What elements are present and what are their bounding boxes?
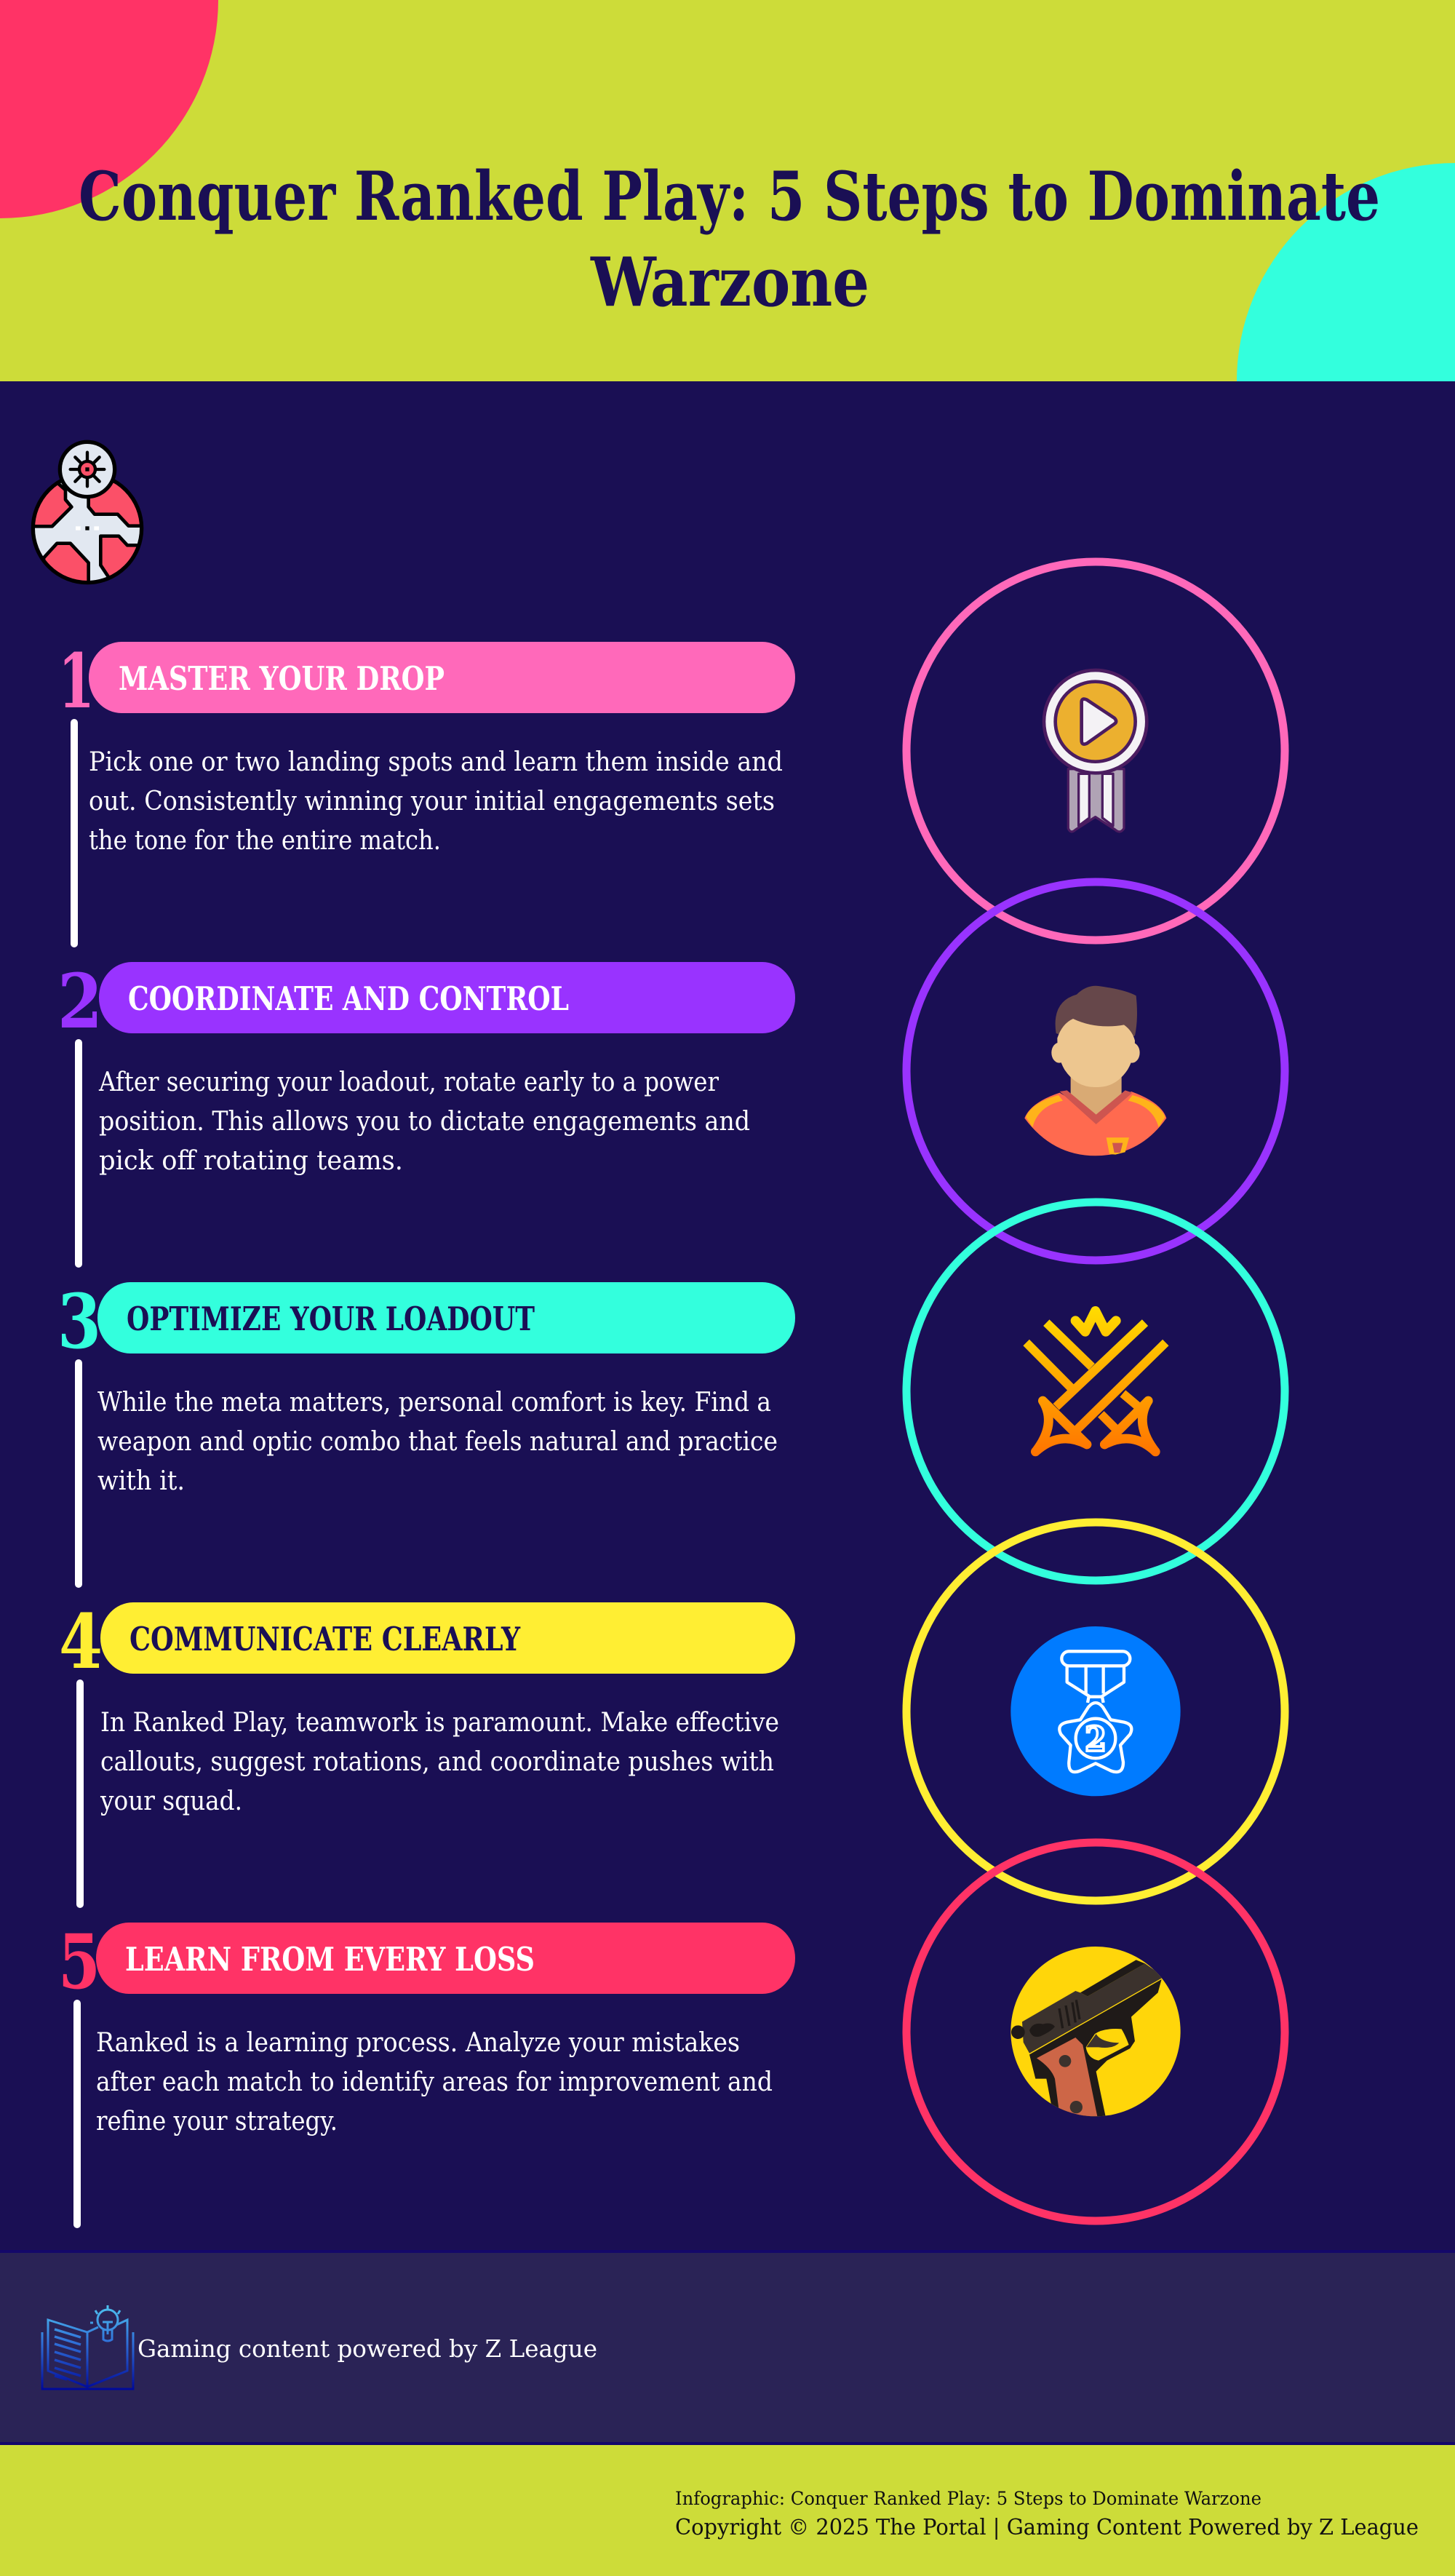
step 1 body text: [89, 747, 783, 856]
header band: [0, 0, 1455, 381]
step 1: master your drop: [58, 637, 795, 947]
step 1 body text: out. Consistently winning your initial engagements sets: [89, 787, 775, 816]
step 5 heading: LEARN FROM EVERY LOSS: [125, 1940, 535, 1979]
step 2 body text: [98, 1068, 750, 1176]
decorative pink circle: [0, 0, 218, 218]
step 3 heading: OPTIMIZE YOUR LOADOUT: [127, 1300, 535, 1338]
step 1 heading: MASTER YOUR DROP: [119, 659, 445, 698]
step 5 body text: refine your strategy.: [96, 2107, 338, 2136]
step 3 body text: [97, 1388, 778, 1496]
step 3 heading pill: [97, 1282, 795, 1353]
step 3: optimize your loadout: [57, 1278, 795, 1588]
footer credit text: Gaming content powered by Z League: [137, 2334, 597, 2363]
decorative teal circle: [1237, 163, 1455, 381]
step 2 body text: After securing your loadout, rotate early to a power: [98, 1068, 719, 1097]
step 4 number: 4: [59, 1598, 103, 1686]
step 4 heading: COMMUNICATE CLEARLY: [129, 1620, 521, 1658]
step 5 heading pill: [96, 1923, 795, 1994]
bottom lime footer: [0, 2445, 1455, 2576]
step 1 heading pill: [89, 642, 795, 713]
step 4 body text: your squad.: [100, 1786, 242, 1816]
step 2 heading: COORDINATE AND CONTROL: [128, 979, 569, 1018]
step 1 body text: the tone for the entire match.: [89, 826, 441, 856]
footer credit band: [0, 2250, 1455, 2445]
icon: medal with play button: [1044, 670, 1147, 832]
ring: step 3: [906, 1202, 1285, 1581]
step 4: communicate clearly: [59, 1598, 795, 1908]
step 4 heading pill: [100, 1602, 795, 1674]
step 5 number: 5: [58, 1918, 100, 2006]
step 3 vertical bar: [75, 1359, 82, 1588]
step 2 heading pill: [99, 962, 795, 1033]
step 5 body text: Ranked is a learning process. Analyze your mistakes: [96, 2028, 740, 2058]
step 5 vertical bar: [73, 2000, 81, 2228]
step 5 body text: after each match to identify areas for improvement and: [96, 2067, 773, 2097]
step 4 body text: In Ranked Play, teamwork is paramount. Make effective: [100, 1708, 779, 1738]
ring: step 1: [906, 562, 1285, 940]
step 4 body text: [100, 1708, 779, 1816]
title: Warzone: [590, 242, 869, 322]
ring: step 2: [906, 882, 1285, 1260]
step 4 vertical bar: [76, 1679, 84, 1908]
step 3 body text: weapon and optic combo that feels natural and practice: [97, 1427, 778, 1457]
step 3 number: 3: [57, 1278, 101, 1366]
step 1 vertical bar: [71, 719, 78, 947]
copyright line: Copyright © 2025 The Portal | Gaming Content Powered by Z League: [675, 2515, 1419, 2540]
step 3 body text: with it.: [97, 1466, 185, 1496]
step 4 body text: callouts, suggest rotations, and coordinate pushes with: [100, 1747, 774, 1777]
step 1 body text: Pick one or two landing spots and learn them inside and: [89, 747, 783, 777]
icon: player in red jersey: [1024, 986, 1166, 1156]
ring: step 5: [906, 1842, 1285, 2221]
icon: cracked globe with virus: [29, 442, 148, 588]
step 5: learn from every loss: [58, 1918, 795, 2228]
step 2 body text: position. This allows you to dictate engagements and: [99, 1107, 750, 1137]
step 3 body text: While the meta matters, personal comfort is key. Find a: [97, 1388, 771, 1418]
icon: open book with lightbulb: [42, 2305, 133, 2389]
step 2: coordinate and control: [57, 958, 795, 1268]
title: [79, 156, 1380, 322]
ring: step 4: [906, 1522, 1285, 1901]
step 1 number: 1: [58, 637, 95, 726]
step 2 body text: pick off rotating teams.: [99, 1146, 403, 1176]
step 5 body text: [96, 2028, 773, 2136]
source line: Infographic: Conquer Ranked Play: 5 Steps to Dominate Warzone: [675, 2488, 1261, 2509]
step 2 vertical bar: [75, 1039, 82, 1268]
icon: blue medal number two: [1010, 1626, 1181, 1796]
step 2 number: 2: [57, 958, 103, 1046]
icon: pistol on yellow disc: [1010, 1947, 1181, 2118]
icon: crossed swords with crown: [1027, 1311, 1165, 1452]
icon: blue medal number two: 2: [1085, 1720, 1107, 1760]
